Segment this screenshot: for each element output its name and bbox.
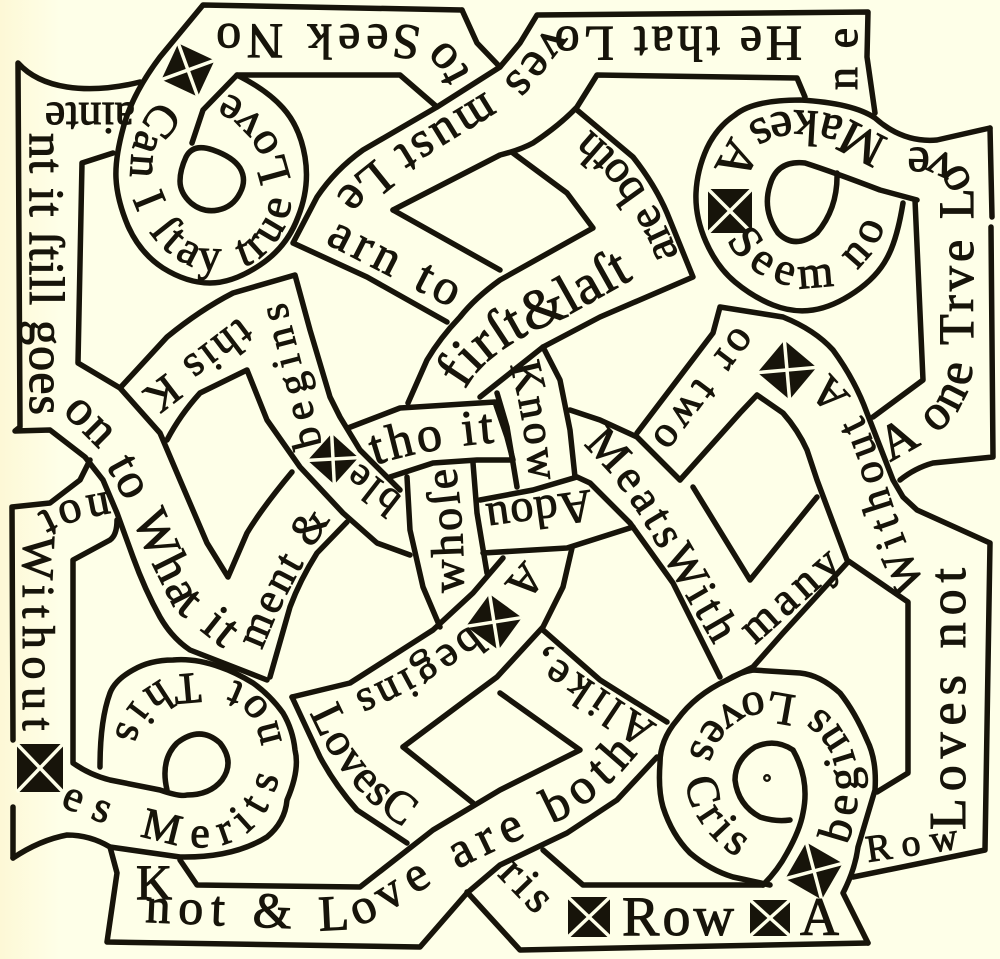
spiral: top right outline [696,100,993,480]
band: without ribbon outline [637,307,990,877]
text: nt it still goes: nt it ſtill goes [22,134,66,414]
band: left ribbon outline [15,63,347,680]
text: whose: whoſe [426,470,464,594]
x mark: centre left [308,434,358,484]
text: not and Love are both: not & Love are both [146,742,638,932]
text: K: K [136,854,172,910]
text: ble: ble [350,464,401,520]
band: central weave outline [120,275,575,747]
text: Meats With: MeatsWith [584,426,734,645]
text: Alike: Alike, [542,646,658,742]
text: Row right: Row [864,830,957,862]
x mark: centre bottom [466,594,522,650]
x mark: top left [161,43,215,97]
spiral: bottom right outline [467,670,875,950]
text: first and last: firſt&laſt [438,251,634,388]
text: ainte: ainte [46,102,134,134]
text: Loves C: LovesC [310,700,419,826]
band: top ribbon outline [293,12,875,322]
text: begins upper: begins [267,304,321,453]
text: not Without: not Without [22,492,112,731]
band: bottom ribbon outline [107,630,667,947]
text: Adou: Adou [485,490,590,530]
text: He that Loves must Le: He that Loves must Le [337,26,802,208]
text: are both: are both [580,129,678,260]
text: A bottom: A [800,887,839,947]
text: or two: or two [654,329,750,446]
text: Seem no: Seem no [728,220,883,290]
x mark: bottom right [785,842,843,900]
x mark: top right [708,189,752,233]
text: A one True Love Makes A: A one Trve Love Makes A [714,110,974,462]
text: Row bottom: Row [622,886,735,948]
text: Can I stay true Love: Can I ſtay true Love [130,94,292,280]
text: tho it: tho it [368,412,494,464]
text: A centre: A [504,560,538,593]
text: ne: ne [834,29,858,90]
spiral: top left outline [116,5,500,283]
x mark: bottom two [750,900,790,936]
x mark: bottom one [568,897,610,937]
text: many: many [741,550,838,645]
text: begins Loves Cris: begins Loves Cris [687,691,868,855]
text: this K: this K [141,320,252,414]
band: meats ribbon outline [480,410,720,677]
band: first and last outline [408,110,693,403]
text: Know: Know [510,358,550,480]
spiral: bottom left outline [12,460,296,858]
text: Loves not: Loves not [930,568,966,829]
text: to Seek No: to Seek No [218,23,468,86]
text: on to What it: on to What it [66,400,238,648]
x mark: right [757,340,817,400]
text: Without A: Without A [816,372,921,594]
text: ment and: ment & [242,511,330,650]
x mark: left [17,744,63,792]
text: es Merits not This: es Merits not This [63,672,282,848]
text: ris: ris [497,862,550,912]
text: arn to: arn to [328,224,458,304]
text: begins lower: begins [356,627,490,712]
